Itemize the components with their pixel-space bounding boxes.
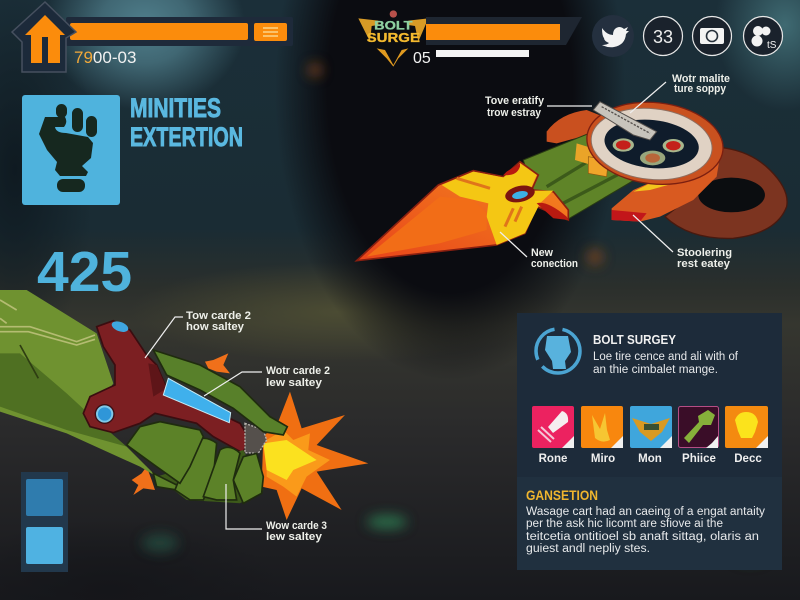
callout: new connection	[500, 232, 578, 270]
callout: top left: Tove eratify	[485, 95, 545, 107]
icon: twitter	[592, 15, 634, 57]
item: Mon: Mon	[638, 453, 662, 465]
lower fin	[612, 157, 720, 222]
upper fin	[547, 110, 603, 143]
callout: top right	[630, 73, 730, 113]
logo: Bolt Surge	[358, 10, 428, 67]
heading: Minities Extertion: MINITIES	[130, 93, 221, 123]
gold blocks	[575, 143, 608, 177]
round housing	[583, 96, 727, 191]
callout: top left	[485, 95, 592, 119]
rear ring handle	[665, 147, 787, 238]
callout: bottom right	[633, 215, 732, 270]
callout: new connection: New	[531, 247, 553, 259]
weapon: bolt blaster	[357, 96, 787, 261]
panel description	[593, 351, 739, 376]
callout: bottom	[226, 484, 327, 543]
orange progress bar	[70, 23, 248, 40]
item: Phiice: Phiice	[682, 453, 716, 465]
item: Miro	[581, 406, 623, 465]
icon: community	[744, 16, 782, 56]
heading: Minities Extertion	[130, 93, 243, 152]
small spark upper	[205, 353, 230, 373]
section body text	[526, 506, 765, 555]
icon: community: tS	[767, 40, 777, 51]
energy bar	[163, 378, 231, 423]
arm	[0, 290, 157, 477]
icon: count 33: 33	[653, 27, 673, 47]
callout: top: Tow carde 2	[186, 310, 251, 322]
background glows	[142, 63, 766, 562]
callout: top right: ture soppy	[674, 83, 727, 95]
item: Decc	[725, 406, 768, 465]
panel description: Loe tire cence and ali with of	[593, 351, 739, 363]
blade	[357, 162, 568, 261]
thumb	[153, 350, 287, 435]
callout: middle: Wotr carde 2	[266, 365, 330, 377]
logo: Bolt Surge: SURGE	[367, 30, 420, 45]
callout: bottom: Wow carde 3	[266, 520, 327, 532]
section body text: Wasage cart had an caeing of a engat antaity	[526, 506, 765, 518]
top centre status bar	[413, 17, 582, 67]
section body text: per the ask hic licomt are sfiove ai the	[526, 518, 723, 530]
panel: side buttons	[21, 472, 68, 572]
lower fin yellow stripe	[633, 178, 680, 192]
callout: middle: lew saltey	[266, 377, 323, 389]
hand callouts	[145, 310, 330, 543]
heading: Minities Extertion: EXTERTION	[130, 122, 243, 152]
explosion	[262, 392, 368, 520]
callout: bottom right: rest eatey	[677, 258, 731, 270]
score counter: 7900-03	[74, 48, 136, 67]
item: Decc: Decc	[734, 453, 762, 465]
menu button	[254, 23, 287, 41]
top centre status bar: 05	[413, 50, 431, 67]
panel description: an thie cimbalet mange.	[593, 364, 718, 376]
top left status bar	[66, 17, 293, 46]
panel title: BOLT SURGEY	[593, 332, 676, 347]
green body grooves	[547, 150, 627, 207]
callout: top: how saltey	[186, 321, 245, 333]
item: Phiice	[678, 406, 718, 465]
fist fingers	[127, 422, 263, 503]
icon: circled fist	[536, 329, 580, 373]
icon: home	[12, 2, 76, 72]
callout: top left: trow estray	[487, 107, 542, 119]
item: Rone	[532, 406, 574, 465]
weapon callouts	[485, 73, 732, 270]
item: Mon	[630, 406, 672, 465]
panel: Bolt Surgey info	[517, 313, 782, 570]
lower fin red edge	[612, 210, 647, 222]
arm with gauntlet	[0, 290, 368, 520]
logo: Bolt Surge: BOLT	[374, 18, 413, 32]
section body text: guiest andl nepliy stes.	[526, 543, 650, 555]
big number 425: 425	[37, 240, 132, 304]
item: Rone: Rone	[539, 453, 567, 465]
callout: bottom: lew saltey	[266, 531, 323, 543]
icon: fist tile	[22, 95, 120, 205]
callout: top	[145, 310, 251, 358]
icon: camera	[692, 16, 732, 56]
green body	[523, 132, 640, 220]
icon: count 33	[644, 16, 682, 56]
maroon cuff	[83, 319, 267, 453]
callout: top right: Wotr malite	[672, 73, 730, 85]
callout: bottom right: Stoolering	[677, 247, 732, 259]
small spark lower	[132, 467, 155, 495]
item: Miro: Miro	[591, 453, 615, 465]
section body text: teitcetia ontitioel sb anaft sittag, olaris an	[526, 531, 759, 543]
section heading: GANSETION	[526, 487, 598, 503]
callout: middle	[204, 365, 330, 396]
callout: new connection: conection	[531, 258, 578, 270]
